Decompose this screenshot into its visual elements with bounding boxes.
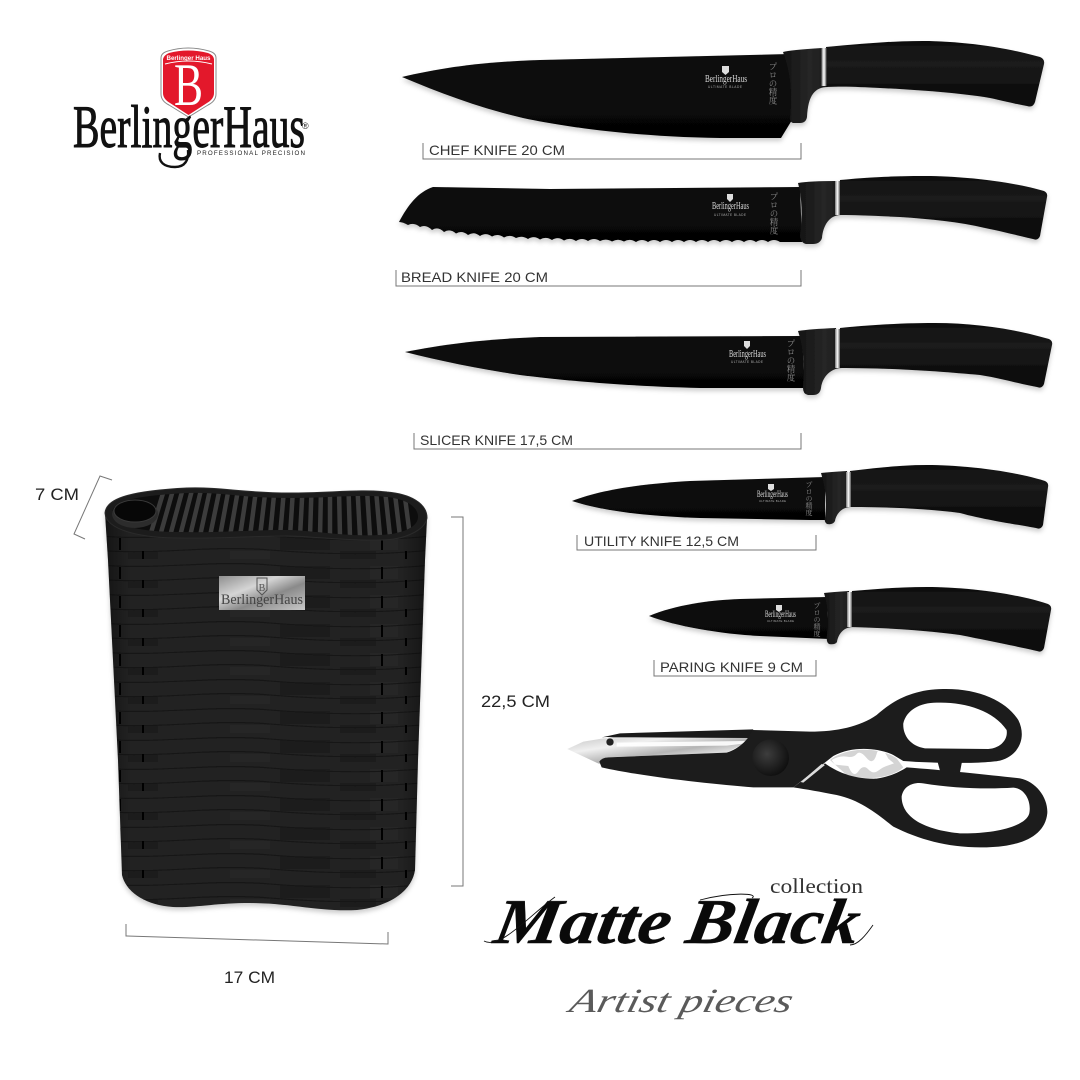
bread knife blade mark: プロの精度 (769, 192, 779, 235)
scissor jaw gap (832, 749, 894, 774)
utility knife drawing (572, 465, 1048, 529)
utility knife (572, 465, 1048, 550)
dimension: height 22,5 cm (451, 517, 550, 886)
bread knife blade mark: BerlingerHaus (712, 201, 749, 212)
dimension: width 17 cm (126, 924, 388, 987)
block round hole (112, 500, 158, 528)
dimension: depth 7 cm: 7 CM (35, 485, 79, 504)
slicer knife blade mark: ULTIMATE BLADE (731, 360, 763, 364)
block grille (112, 490, 418, 536)
block edge shading (105, 488, 427, 910)
block badge: B (259, 583, 266, 594)
title flourish (484, 894, 873, 945)
upper arm (599, 689, 1022, 787)
tagline: PROFESSIONAL PRECISION (197, 150, 305, 157)
paring knife blade mark: ULTIMATE BLADE (767, 619, 794, 623)
paring knife blade mark: プロの精度 (813, 602, 821, 638)
chef knife blade mark: BerlingerHaus (705, 73, 747, 85)
chef knife drawing (402, 41, 1044, 138)
chef knife blade mark: プロの精度 (768, 62, 778, 105)
slicer knife drawing (405, 323, 1052, 395)
paring knife (649, 587, 1051, 676)
utility knife label (577, 533, 816, 550)
icon: red shield: B (174, 52, 203, 118)
collection title (484, 874, 873, 1020)
slicer knife blade mark: BerlingerHaus (729, 349, 766, 360)
dimension: height 22,5 cm: 22,5 CM (481, 692, 550, 711)
utility knife blade mark (757, 481, 813, 517)
scissor blade (567, 737, 748, 764)
peeler rivet (606, 738, 614, 746)
slicer knife label: SLICER KNIFE 17,5 CM (420, 432, 573, 448)
utility knife label: UTILITY KNIFE 12,5 CM (584, 533, 739, 549)
brand name: BerlingerHaus (73, 94, 305, 160)
scissor jaws (830, 750, 903, 778)
paring knife label: PARING KNIFE 9 CM (660, 659, 803, 675)
paring knife blade mark (765, 602, 821, 638)
chef knife blade mark (705, 62, 778, 105)
logo: Berlinger Haus (73, 48, 309, 167)
peeler spine (602, 729, 753, 738)
icon: red shield: Berlinger Haus (166, 55, 211, 62)
registered mark: ® (302, 121, 309, 131)
utility knife blade mark: プロの精度 (805, 481, 813, 517)
block body (105, 488, 427, 910)
slicer knife (405, 323, 1052, 449)
bread knife label: BREAD KNIFE 20 CM (401, 269, 548, 285)
peeler serration (617, 741, 745, 747)
block badge: BerlingerHaus (221, 592, 303, 608)
chef knife blade mark: ULTIMATE BLADE (708, 85, 742, 89)
bread knife (396, 176, 1047, 286)
paring knife drawing (649, 587, 1051, 652)
bread knife label (396, 269, 801, 286)
icon: red shield (161, 48, 216, 118)
bread knife blade mark (712, 192, 779, 235)
dimension: depth 7 cm (35, 476, 112, 539)
slicer knife blade mark (729, 339, 796, 382)
paring knife blade mark: BerlingerHaus (765, 609, 796, 619)
Matte: Matte (488, 886, 678, 957)
connector tab (937, 758, 963, 772)
g descender loop (160, 150, 188, 167)
bread knife blade mark: ULTIMATE BLADE (714, 213, 746, 217)
chef knife (402, 41, 1044, 159)
lower arm (793, 763, 1047, 847)
collection word: collection (770, 874, 863, 898)
block badge (219, 576, 305, 610)
silver sliver (801, 764, 825, 783)
utility knife blade mark: BerlingerHaus (757, 489, 788, 499)
chef knife label (423, 142, 801, 159)
slicer knife label (414, 432, 801, 449)
Artist pieces: Artist pieces (563, 982, 797, 1020)
scissors (567, 689, 1047, 847)
chef knife label: CHEF KNIFE 20 CM (429, 142, 565, 158)
pivot screw (752, 739, 789, 776)
block rim (105, 488, 427, 540)
dimension: width 17 cm: 17 CM (224, 968, 275, 987)
knife block (105, 488, 427, 910)
Black: Black (680, 886, 866, 957)
slicer knife blade mark: プロの精度 (786, 339, 796, 382)
utility knife blade mark: ULTIMATE BLADE (759, 499, 786, 503)
bread knife drawing (399, 176, 1047, 244)
